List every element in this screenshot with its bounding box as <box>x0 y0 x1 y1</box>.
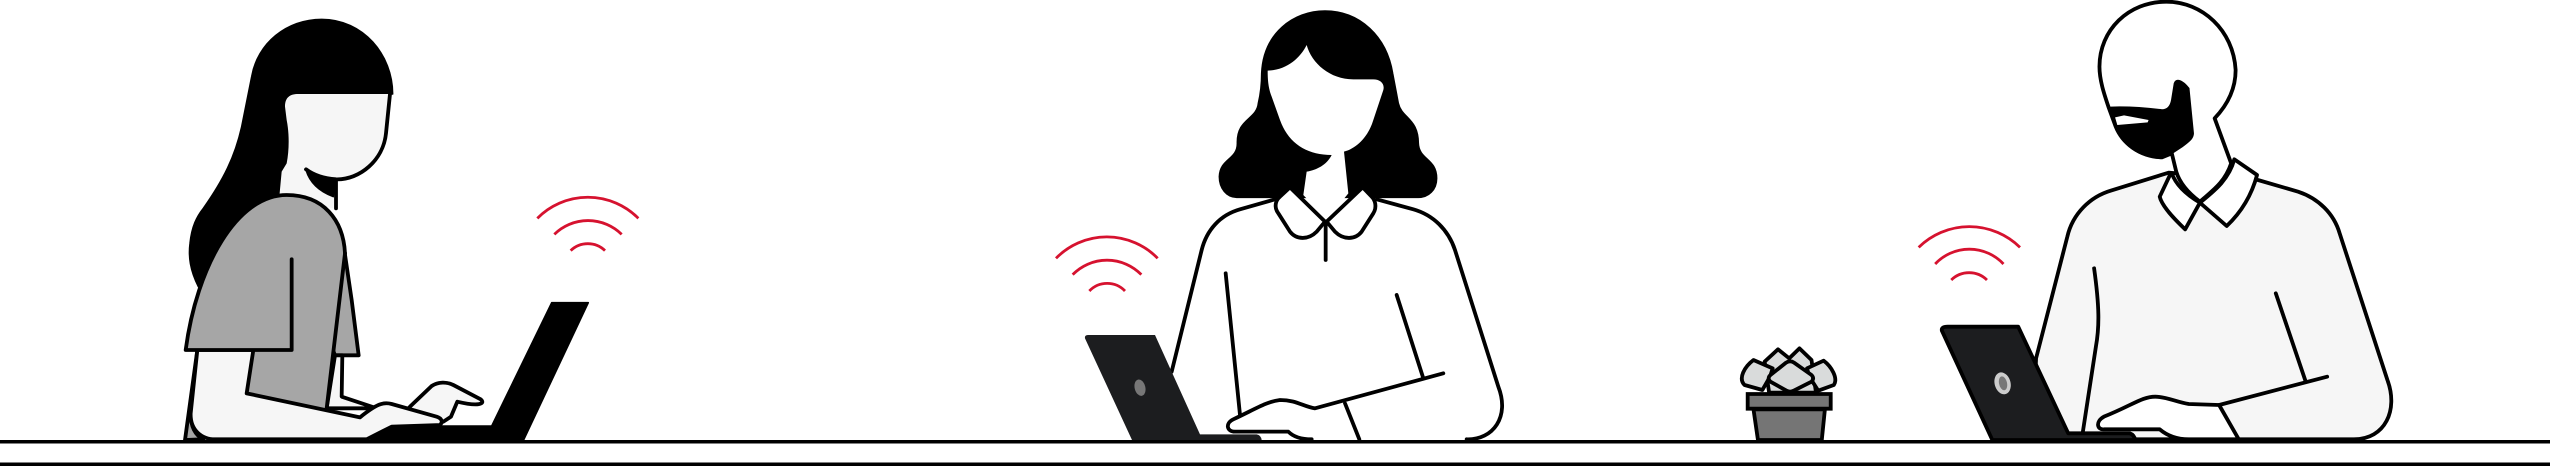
pot rim <box>1748 394 1831 409</box>
blouse tie line <box>1324 222 1328 260</box>
collar: right <box>2200 159 2257 226</box>
body: back of gray shirt <box>327 243 359 355</box>
arm shadow <box>185 350 203 440</box>
figure: bearded man, plant and laptop <box>1742 2 2391 440</box>
leaf left <box>1742 360 1773 390</box>
torso: gray shirt front <box>247 267 345 409</box>
laptop logo <box>1993 372 2013 395</box>
collar: left <box>1276 187 1325 238</box>
laptop: side view in black <box>370 303 588 441</box>
head and neck <box>2099 2 2236 202</box>
collar: right <box>1327 187 1375 238</box>
arm: forearm and hand <box>1228 373 1443 439</box>
hair: long black hair <box>189 19 393 287</box>
chin shadow <box>306 170 336 197</box>
table: top edge <box>0 440 2550 444</box>
table: bottom edge <box>0 462 2550 466</box>
body outline: blouse <box>1172 199 1275 372</box>
beard <box>2111 81 2193 157</box>
face and neck <box>1268 45 1384 220</box>
arm lines <box>2082 268 2306 440</box>
plant pot <box>1753 409 1825 440</box>
sleeve outline <box>186 195 345 350</box>
body: sweater <box>2033 173 2391 439</box>
leaf centre <box>1769 361 1813 392</box>
face and neck <box>279 94 390 208</box>
wifi signal <box>1056 237 1158 291</box>
laptop logo <box>1133 378 1147 397</box>
arm: forearm and hand <box>2098 397 2239 439</box>
sleeve fold line <box>327 253 345 408</box>
figure: woman in profile with laptop <box>185 19 638 441</box>
hand: pointing finger <box>403 383 482 422</box>
body outline: right shoulder and arm <box>1377 199 1502 439</box>
wifi signal <box>537 197 638 251</box>
mouth <box>2115 115 2149 125</box>
laptop: back view <box>1085 335 1262 440</box>
collar: left <box>2160 173 2200 229</box>
face outline <box>306 94 390 179</box>
wifi signal <box>1919 227 2020 280</box>
neck line <box>334 180 338 208</box>
plant: potted succulent <box>1742 348 1835 440</box>
sleeve fill <box>186 195 345 350</box>
figure: woman facing forward with laptop <box>1056 11 1502 440</box>
forearm line <box>2219 377 2327 405</box>
back leaves <box>1765 348 1816 393</box>
arm lines <box>1226 273 1423 439</box>
back arm and hand <box>327 355 377 408</box>
laptop: back view <box>1942 327 2135 440</box>
leaf right <box>1807 361 1835 391</box>
hair: wavy black hair <box>1219 11 1437 197</box>
arm: forearm on the table <box>191 350 442 439</box>
